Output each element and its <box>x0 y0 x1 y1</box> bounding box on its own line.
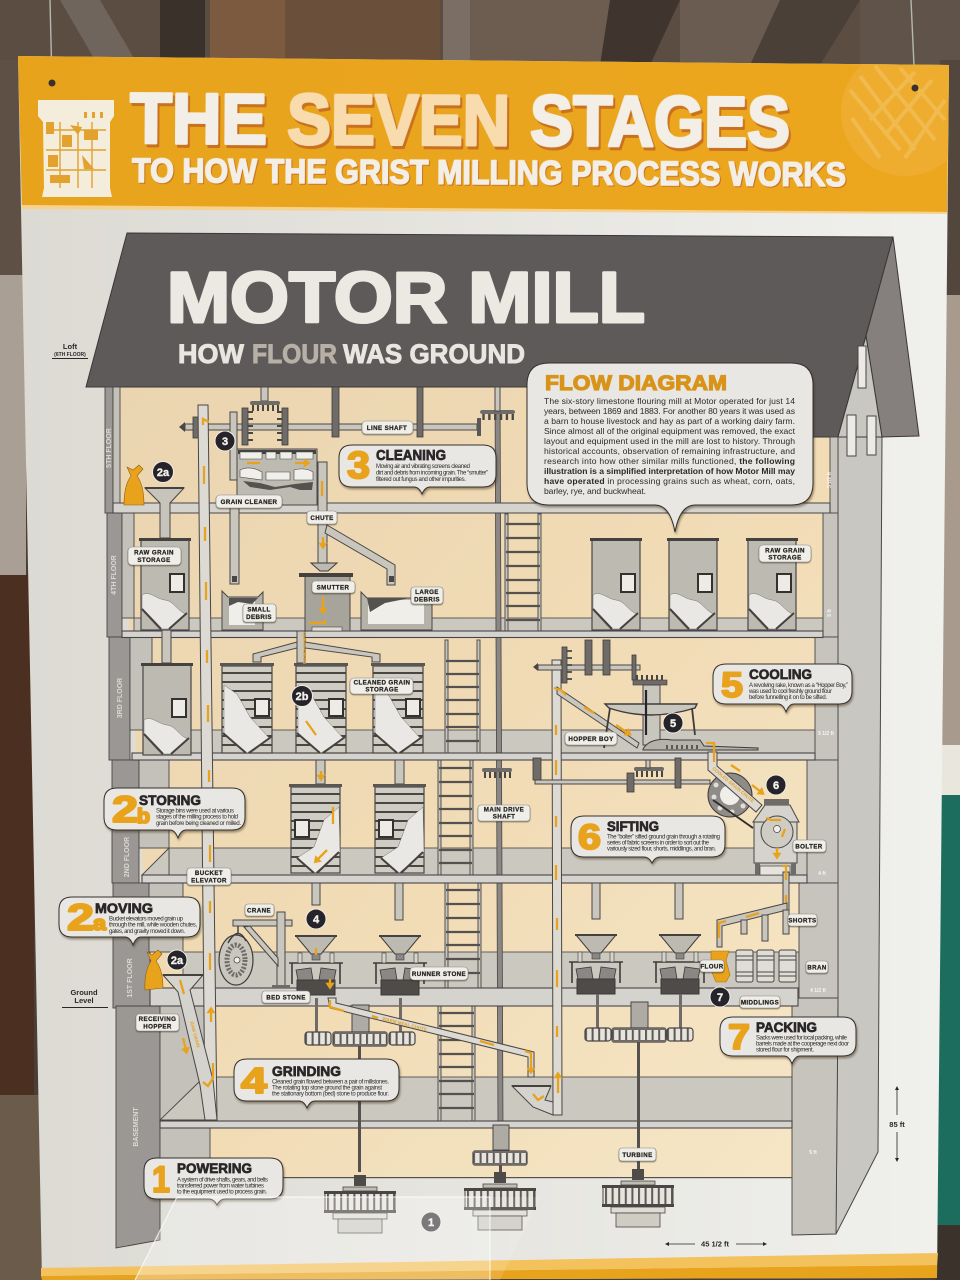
callout: 7 packing: barrels made at the cooperage next door <box>756 1042 849 1048</box>
crane <box>219 912 292 988</box>
wall measurements <box>809 472 834 1156</box>
label: raw grain storage right: RAW GRAIN <box>765 548 805 554</box>
label: shorts: SHORTS <box>788 918 817 924</box>
header banner <box>18 48 960 214</box>
sub-floor gears and shafts <box>305 994 693 1172</box>
badge 2a lower: 2a <box>171 955 184 967</box>
callout: flow diagram: illustration is a simplified interpretation of how Motor Mill may <box>544 466 795 476</box>
callout: 2a moving: a <box>93 913 107 935</box>
callout: 6 sifting <box>571 816 725 863</box>
badge 7: 7 <box>717 992 723 1004</box>
grain sack and hopper, fifth floor <box>124 465 184 538</box>
badge 2b <box>292 686 312 706</box>
callout: 4 grinding: Cleaned grain flowed between a pair of millstones. <box>272 1080 389 1086</box>
label: line shaft: LINE SHAFT <box>367 425 407 432</box>
label: small debris <box>243 604 276 622</box>
callout: flow diagram: have operated in processing grains such as wheat, corn, oats, <box>544 476 795 486</box>
badge 2a lower <box>167 950 187 970</box>
label: chute <box>307 511 337 524</box>
icon: grain ball <box>841 64 949 176</box>
label: cleaned grain storage: CLEANED GRAIN <box>354 680 411 686</box>
badge 3 <box>215 431 235 451</box>
label: bran: BRAN <box>807 964 827 972</box>
label: raw grain storage: STORAGE <box>137 557 171 564</box>
floor labels: 2ND FLOOR <box>124 837 131 877</box>
callout: 6 sifting: series of fabric screens in order to sort out the <box>607 840 710 846</box>
callout: 3 cleaning: filtered out fungus and other impurities. <box>376 477 466 483</box>
label: grain cleaner: GRAIN CLEANER <box>221 499 278 506</box>
label: bucket elevator: BUCKET <box>195 870 223 877</box>
callout: flow diagram: research into how other similar mills functioned, the following <box>544 456 795 466</box>
grain cleaner machine <box>230 449 395 585</box>
badge 4: 4 <box>313 914 320 926</box>
subtitle: how flour was ground <box>178 339 525 369</box>
callout: 3 cleaning: CLEANING <box>376 448 446 464</box>
badge 5: 5 <box>670 718 676 730</box>
badge 3: 3 <box>222 436 228 448</box>
label: raw grain storage right <box>759 545 811 562</box>
subtitle: how flour was ground: FLOUR <box>252 339 337 369</box>
callout: 7 packing <box>720 1017 856 1064</box>
wall measurements: 5 1/2 ft <box>827 472 833 488</box>
callout: 1 powering: POWERING <box>177 1160 252 1176</box>
callout: 5 cooling: was used to cool freshly ground flour <box>748 689 832 695</box>
label: crane <box>245 904 274 916</box>
callout: 2a moving: through the mill, while wooden chutes, <box>109 922 197 928</box>
label: main drive shaft <box>478 805 530 821</box>
callout: flow diagram: Since almost all of the original equipment was removed, the exact <box>544 426 796 436</box>
label: smutter: SMUTTER <box>317 584 349 592</box>
subtitle: TO HOW THE GRIST MILLING PROCESS WORKS <box>132 152 846 194</box>
main vertical shaft <box>495 387 503 1130</box>
hanging wires <box>50 0 915 88</box>
label: receiving hopper: HOPPER <box>143 1024 172 1030</box>
callout: flow diagram <box>527 363 813 532</box>
label: receiving hopper: RECEIVING <box>139 1016 176 1023</box>
callout: 2b storing: stages of the milling process to hold <box>156 814 238 820</box>
callout: 3 cleaning: dirt and debris from incoming grain. The “smutter” <box>376 470 488 476</box>
dimension: 85 ft: 85 ft <box>889 1120 905 1129</box>
floors <box>113 503 830 1178</box>
callout: 1 powering <box>144 1158 283 1205</box>
callout: 6 sifting: 6 <box>578 818 601 857</box>
title: the seven stages: SEVEN <box>287 81 510 161</box>
label: chute: CHUTE <box>310 515 334 522</box>
receiving hopper and sack: RAW GRAIN <box>189 1021 201 1049</box>
wall measurements: 5 ft <box>827 609 833 617</box>
callout: 2b storing: Storage bins were used at various <box>156 808 234 814</box>
level annotation: ground level: Ground <box>70 988 98 997</box>
callout: 5 cooling: A revolving rake, known as a “Hopper Boy,” <box>749 683 848 689</box>
callout: 4 grinding: GRINDING <box>272 1063 341 1079</box>
meal collector hopper <box>512 1086 553 1115</box>
floor labels: 1ST FLOOR <box>127 958 134 998</box>
level annotation: loft <box>52 342 88 359</box>
label: bed stone <box>262 991 310 1003</box>
badge 7 <box>710 987 730 1007</box>
callout: 1 powering: 1 <box>152 1159 170 1200</box>
label: bolter <box>793 840 826 852</box>
label: turbine: TURBINE <box>622 1152 653 1159</box>
callout: flow diagram: years, between 1869 and 1883. For another 80 years it was used as <box>544 406 795 416</box>
label: hopper boy <box>565 732 617 745</box>
label: line shaft <box>362 421 413 434</box>
floor labels: 5TH FLOOR <box>106 428 113 468</box>
hanging holes <box>48 80 918 92</box>
label: raw grain storage right: STORAGE <box>768 554 802 562</box>
main shaft bevel gear <box>482 768 512 778</box>
bins: cleaned grain storage <box>220 642 426 873</box>
gable windows <box>847 346 876 456</box>
label: shorts <box>788 914 817 926</box>
label: small debris: DEBRIS <box>246 614 272 621</box>
label: crane: CRANE <box>247 908 271 914</box>
flour sack and barrels <box>711 950 796 982</box>
label: raw grain storage <box>128 547 181 565</box>
callout: 2a moving <box>59 897 200 945</box>
callout: 1 powering: transferred power from water turbines <box>177 1184 264 1190</box>
callout: 5 cooling <box>713 664 852 712</box>
label: bucket elevator: ELEVATOR <box>191 878 227 884</box>
callout: 2b storing: 2 <box>112 789 138 830</box>
label: hopper boy: HOPPER BOY <box>568 736 614 743</box>
label: raw grain storage: RAW GRAIN <box>134 550 174 556</box>
icon: mill silhouette <box>38 100 114 197</box>
callout: 2a moving: Bucket elevators moved grain up <box>109 916 184 922</box>
label: middlings: MIDDLINGS <box>741 1000 779 1006</box>
wall measurements: 4 ft <box>818 871 826 877</box>
callout: 2a moving: MOVING <box>95 900 153 916</box>
title: the seven stages <box>130 80 790 163</box>
title: motor mill: MOTOR MILL <box>167 259 645 338</box>
callout: 2b storing <box>104 788 245 838</box>
callout: 5 cooling: before funnelling it on to be sifted. <box>749 695 827 701</box>
callout: 3 cleaning <box>339 445 496 494</box>
smutter and debris boxes: CLEAN GRAIN <box>302 632 307 665</box>
label: runner stone: RUNNER STONE <box>412 971 466 978</box>
badge 4 <box>306 909 326 929</box>
label: smutter <box>312 581 355 593</box>
interior cream <box>113 387 838 1178</box>
left and right walls <box>105 387 838 1248</box>
label: receiving hopper <box>136 1014 179 1031</box>
grey wainscot bands <box>134 618 823 1121</box>
hopper boy mechanism and upper gears <box>533 640 758 750</box>
bins: raw grain <box>139 538 798 755</box>
level annotation: loft: (6TH FLOOR) <box>54 352 86 358</box>
millstones <box>289 934 707 995</box>
callout: flow diagram: FLOW DIAGRAM <box>545 372 727 395</box>
subtitle: how flour was ground: WAS GROUND <box>343 339 525 369</box>
roof <box>86 233 893 437</box>
callout: 2a moving: 2 <box>67 897 94 938</box>
callout: 4 grinding: The rotating top stone ground the grain against <box>272 1086 382 1092</box>
hanging spouts below second floor <box>312 883 683 920</box>
label: grain cleaner <box>216 495 282 508</box>
callout: 3 cleaning: 3 <box>347 445 370 487</box>
callout: flow diagram: a barn to house livestock and hay as part of a working dairy farm. <box>544 416 795 426</box>
smutter and debris boxes <box>222 563 432 665</box>
callout: 5 cooling: COOLING <box>749 667 812 682</box>
label: middlings <box>740 996 780 1008</box>
floor labels: 4TH FLOOR <box>111 555 118 595</box>
level annotation: ground level <box>62 988 108 1008</box>
level annotation: loft: Loft <box>63 342 78 351</box>
wall measurements: 4 1/2 ft <box>810 988 826 994</box>
label: main drive shaft: SHAFT <box>493 814 515 820</box>
callout: 1 powering: to the equipment used to process grain. <box>177 1190 267 1196</box>
badge 1: 1 <box>428 1217 434 1229</box>
right bucket elevator <box>552 660 562 1115</box>
callout: flow diagram: The six-story limestone flouring mill at Motor operated for just 14 <box>544 396 795 406</box>
label: large debris <box>411 587 443 604</box>
label: small debris: SMALL <box>247 606 271 614</box>
callout: 3 cleaning: Moving air and vibrating screens cleaned <box>376 464 470 470</box>
badge 2a top <box>152 462 174 482</box>
badge 1 <box>421 1212 441 1232</box>
badge 2b: 2b <box>296 691 309 703</box>
label: bed stone: BED STONE <box>266 994 306 1002</box>
label: flour <box>700 960 724 972</box>
side wall <box>836 335 882 1234</box>
label: large debris: DEBRIS <box>414 596 440 604</box>
callout: 2a moving: gates, and gravity moved it down. <box>109 929 185 935</box>
badge 6 <box>766 775 786 795</box>
callout: 7 packing: 7 <box>728 1018 750 1057</box>
callout: 6 sifting: SIFTING <box>607 819 659 834</box>
label: bolter: BOLTER <box>795 844 823 850</box>
callout: 6 sifting: The “bolter” sifted ground grain through a rotating <box>607 834 720 840</box>
callout: 1 powering: A system of drive shafts, gears, and belts <box>177 1178 268 1184</box>
badge 6: 6 <box>773 780 779 792</box>
wall measurements: 5 ft <box>809 1150 817 1156</box>
wall measurements: 5 1/2 ft <box>818 731 834 737</box>
callout: 7 packing: stored flour for shipment. <box>756 1048 814 1054</box>
number badges <box>152 431 786 1232</box>
callout: 6 sifting: variously sized flour, shorts, middlings, and bran. <box>607 846 716 852</box>
label: bran <box>806 961 828 973</box>
bottom orange band <box>41 1253 938 1280</box>
badge 5 <box>663 713 683 733</box>
level annotation: ground level: Level <box>74 996 94 1005</box>
dimension: 85 ft <box>889 1086 905 1162</box>
label: runner stone <box>410 967 468 980</box>
bolter <box>753 799 799 875</box>
title: the seven stages: STAGES <box>530 82 790 163</box>
callout: 7 packing: PACKING <box>756 1020 817 1035</box>
sifting chute and outlets <box>717 866 789 947</box>
turbines <box>324 1125 674 1233</box>
left bucket elevator <box>198 405 217 1120</box>
callout: flow diagram: historical accounts, observation of remaining infrastructure, and <box>544 446 795 456</box>
floor labels <box>106 428 140 1147</box>
callout: 7 packing: Sacks were used for local packing, while <box>756 1036 848 1042</box>
warm meal chute <box>328 998 553 1115</box>
floor labels: BASEMENT <box>133 1107 140 1147</box>
acrylic stand overlay <box>135 1197 540 1280</box>
label: bucket elevator <box>187 868 231 885</box>
lower shaft, cooled grain chute, gear <box>533 743 762 828</box>
ladders <box>438 514 541 1121</box>
callout: 2b storing: b <box>137 806 150 828</box>
title: the seven stages: THE <box>130 80 267 160</box>
callout: flow diagram: layout and equipment used in the mill are lost to history. Through <box>544 436 795 446</box>
label: cleaned grain storage: STORAGE <box>365 686 399 694</box>
receiving hopper and sack <box>145 950 217 1120</box>
callout: 5 cooling: 5 <box>721 666 743 705</box>
label: flour: FLOUR <box>700 964 724 970</box>
label: large debris: LARGE <box>415 589 439 596</box>
component labels <box>128 421 828 1161</box>
label: cleaned grain storage <box>350 678 413 694</box>
line shaft and top gears <box>179 387 515 480</box>
mill building <box>86 233 919 1234</box>
callout: 2b storing: STORING <box>139 792 201 808</box>
callout: 2b storing: grain before being cleaned or milled. <box>156 821 241 827</box>
subtitle: how flour was ground: HOW <box>178 339 245 369</box>
dimension: 45 1/2 ft: 45 1/2 ft <box>701 1240 729 1248</box>
callout: 4 grinding <box>234 1059 399 1108</box>
callout: 4 grinding: the stationary bottom (bed) stone to produce flour. <box>272 1092 389 1098</box>
dimension: 45 1/2 ft <box>665 1240 767 1248</box>
label: main drive shaft: MAIN DRIVE <box>484 806 524 814</box>
lower shaft, cooled grain chute, gear: COOLED GRAIN CHUTE <box>711 766 755 804</box>
callout: flow diagram: barley, rye, and buckwheat. <box>544 486 646 496</box>
label: turbine <box>619 1148 656 1161</box>
callout: 4 grinding: 4 <box>241 1060 267 1101</box>
warm meal chute: WARM MEAL CHUTE <box>382 1016 427 1032</box>
badge 2a top: 2a <box>157 467 170 479</box>
floor labels: 3RD FLOOR <box>117 678 124 718</box>
